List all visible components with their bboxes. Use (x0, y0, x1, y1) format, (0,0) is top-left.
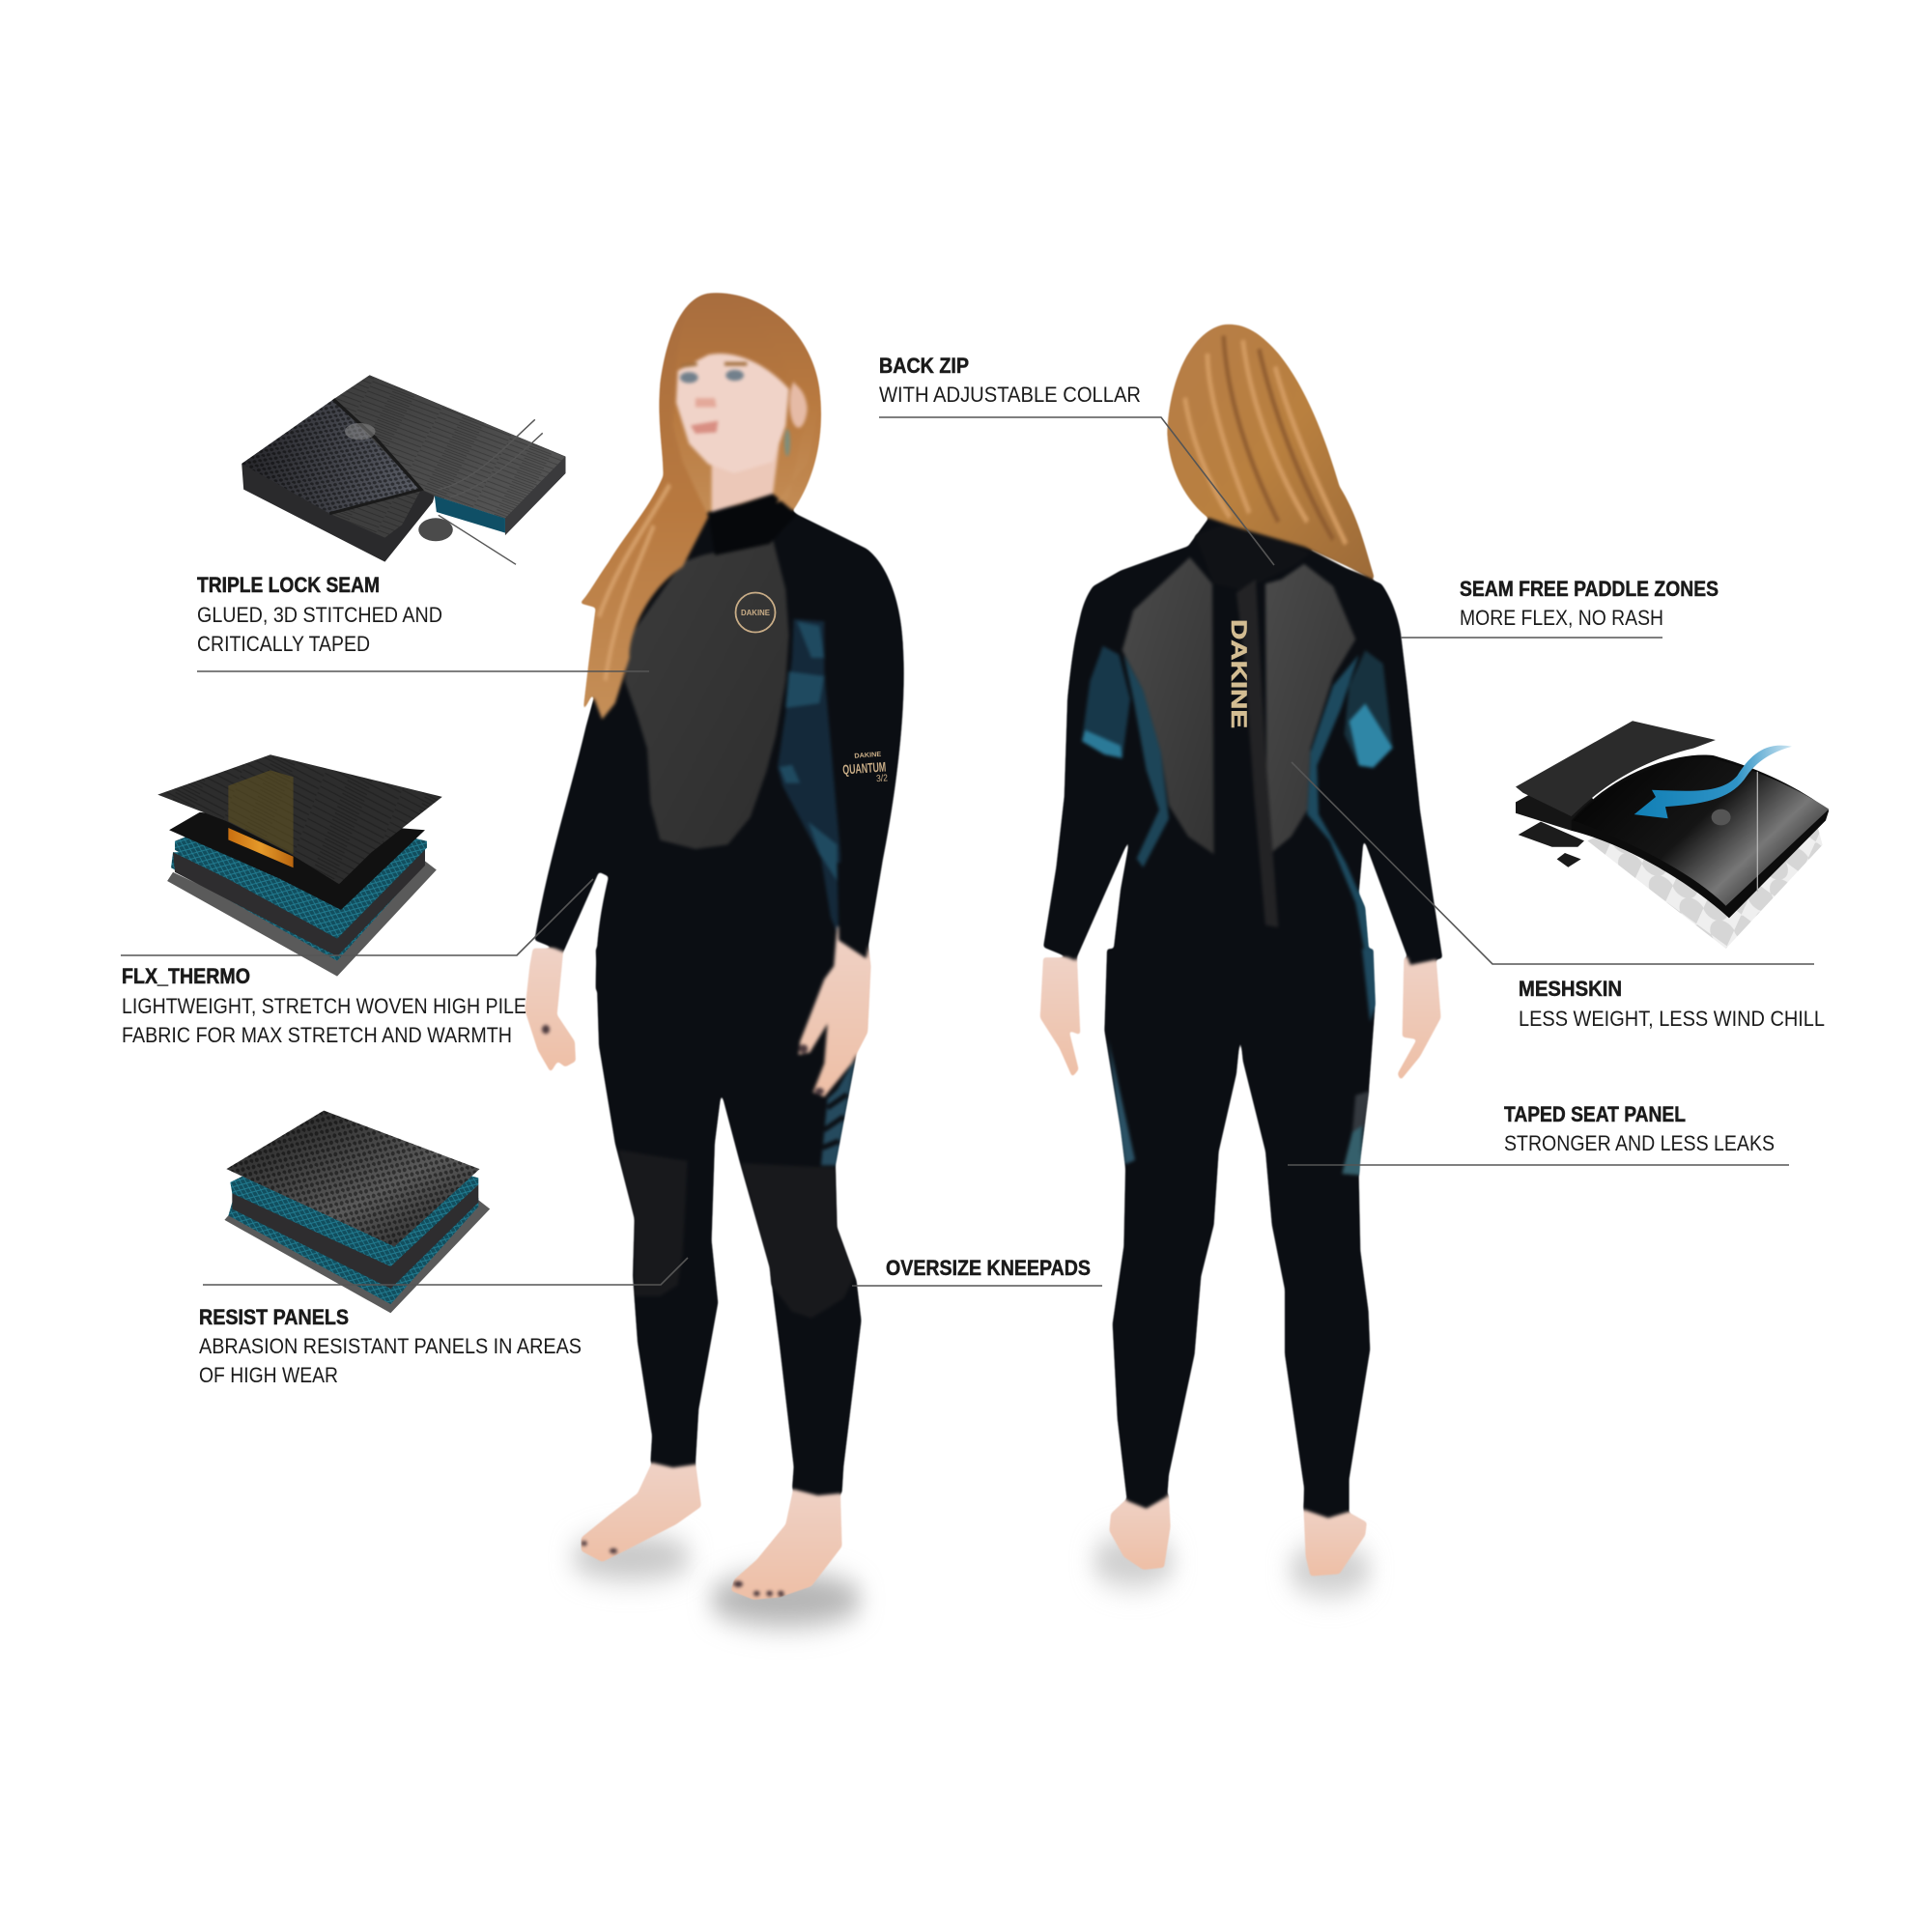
callout: meshskin (1292, 762, 1825, 1031)
sleeve logo: QUANTUM (842, 758, 887, 778)
callout: taped seat panel: TAPED SEAT PANEL (1504, 1102, 1686, 1126)
earring (784, 429, 790, 456)
callout: triple lock seam: TRIPLE LOCK SEAM (197, 573, 380, 597)
air arrow (1634, 746, 1792, 818)
kneepads (618, 1150, 688, 1296)
back logo: DAKINE (1227, 619, 1251, 728)
callout: seam free paddle zones: MORE FLEX, NO RASH (1460, 606, 1663, 630)
callout: meshskin: MESHSKIN (1519, 977, 1622, 1001)
callout: resist panels: OF HIGH WEAR (199, 1363, 338, 1387)
callout: flx thermo: FABRIC FOR MAX STRETCH AND WARMTH (122, 1023, 512, 1047)
swatch: resist panels (224, 1111, 490, 1313)
callout: seam free paddle zones (1401, 577, 1719, 638)
front suit torso and arms (534, 494, 904, 990)
callout: triple lock seam (197, 573, 649, 671)
collar (708, 494, 797, 555)
sleeve logo (841, 751, 889, 787)
right cuff (838, 863, 882, 958)
chest panel (625, 539, 789, 849)
callout: seam free paddle zones: SEAM FREE PADDLE ZONES (1460, 577, 1719, 601)
nose (696, 398, 717, 408)
eyes (680, 372, 698, 384)
front hand top (799, 926, 871, 1096)
callout: flx thermo: LIGHTWEIGHT, STRETCH WOVEN HIGH PILE (122, 994, 526, 1018)
callout: taped seat panel (1288, 1102, 1789, 1165)
callout: taped seat panel: STRONGER AND LESS LEAKS (1504, 1131, 1775, 1155)
callout: back zip (879, 354, 1274, 565)
swatch: flx thermo (157, 754, 442, 977)
back legs (1104, 949, 1376, 1518)
lower left print (1108, 1039, 1135, 1164)
back suit torso and arms (1043, 508, 1442, 1013)
chest logo (736, 593, 775, 632)
swatch: meshskin (1516, 721, 1829, 949)
callout: resist panels: ABRASION RESISTANT PANELS IN AREAS (199, 1334, 582, 1358)
back left panel (1122, 557, 1214, 854)
water drop (1712, 810, 1731, 825)
front face and neck (676, 354, 808, 512)
left side print (1123, 655, 1169, 867)
callout: oversize kneepads: OVERSIZE KNEEPADS (886, 1256, 1091, 1280)
foot shadows (570, 1535, 1372, 1626)
mouth (691, 421, 718, 434)
right side print (1307, 655, 1374, 1001)
callout: back zip: BACK ZIP (879, 354, 969, 378)
callout: back zip: WITH ADJUSTABLE COLLAR (879, 383, 1141, 407)
back figure (1040, 325, 1442, 1577)
hands and feet front (525, 949, 842, 1600)
front hair back layer (660, 293, 821, 526)
callout: resist panels (199, 1258, 688, 1387)
sleeve logo: DAKINE (854, 752, 882, 760)
swatch: triple lock seam (242, 375, 565, 564)
callout: meshskin: LESS WEIGHT, LESS WIND CHILL (1519, 1007, 1825, 1031)
right shoulder print (1345, 650, 1393, 768)
callout: flx thermo: FLX_THERMO (122, 964, 250, 988)
hands and feet back (1040, 957, 1441, 1577)
callout: triple lock seam: GLUED, 3D STITCHED AND (197, 603, 442, 627)
zip strap (1236, 580, 1278, 927)
callout: triple lock seam: CRITICALLY TAPED (197, 632, 370, 656)
back right panel (1265, 564, 1355, 856)
callout: resist panels: RESIST PANELS (199, 1305, 349, 1329)
thigh print (821, 1059, 855, 1165)
neck flap (1195, 522, 1311, 590)
back hair (1167, 325, 1375, 580)
right stripe print (1362, 949, 1376, 1022)
front hair strands (580, 293, 819, 720)
front figure (525, 293, 904, 1600)
callout: flx thermo (121, 879, 593, 1047)
sleeve logo: 3/2 (876, 773, 889, 784)
side print panel (778, 619, 840, 940)
front legs (596, 949, 867, 1495)
chest logo: DAKINE (741, 609, 771, 617)
taped seat panel patch (1342, 1125, 1363, 1176)
left shoulder print (1082, 646, 1130, 759)
